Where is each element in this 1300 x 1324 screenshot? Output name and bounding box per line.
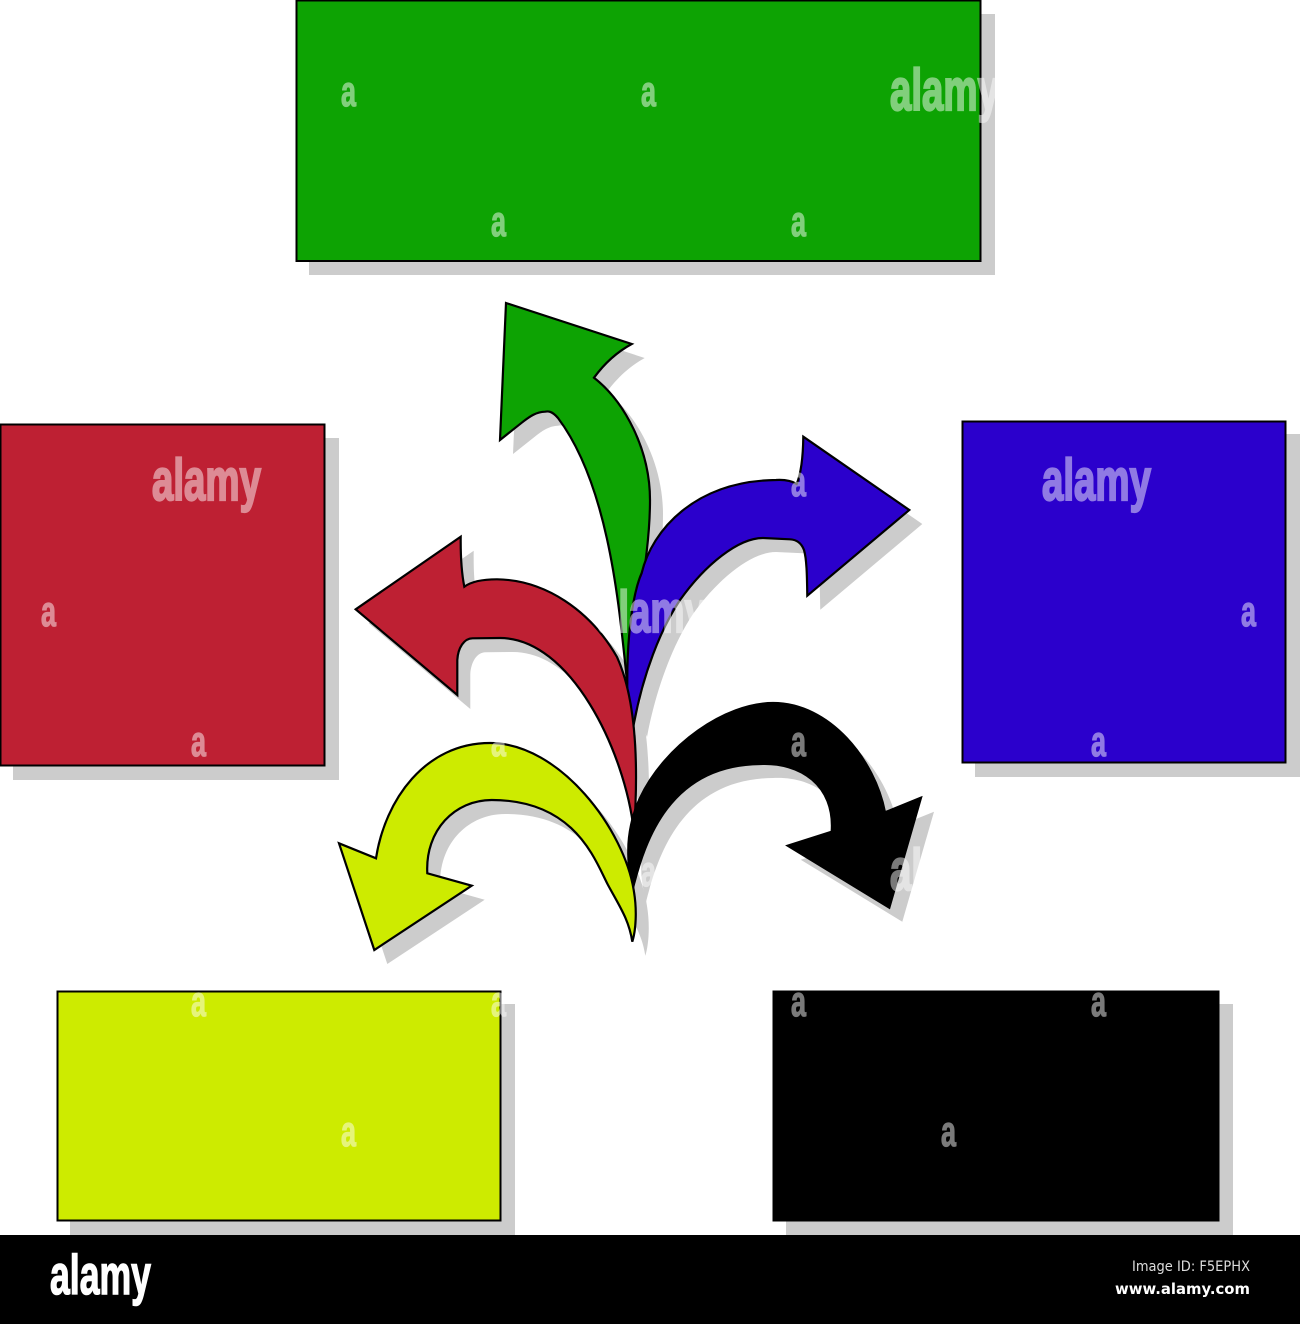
- watermarks: a: [1091, 978, 1107, 1026]
- watermarks: a: [641, 68, 657, 116]
- watermarks: alamy: [597, 580, 706, 645]
- watermarks: alamy: [890, 58, 999, 123]
- watermarks: a: [791, 458, 807, 506]
- watermarks: a: [191, 978, 207, 1026]
- watermarks: a: [491, 978, 507, 1026]
- footer bar: [0, 1235, 1300, 1324]
- panel: blue box: [962, 422, 1300, 777]
- watermarks: alamy: [890, 838, 999, 903]
- panel: green box: [296, 0, 995, 275]
- arrow: yellow: [339, 743, 636, 950]
- watermarks: a: [791, 718, 807, 766]
- watermarks: alamy: [152, 448, 261, 513]
- watermarks: a: [41, 588, 57, 636]
- watermarks: a: [491, 718, 507, 766]
- arrow: green: [500, 303, 650, 690]
- watermarks: a: [941, 1108, 957, 1156]
- watermarks: a: [341, 68, 357, 116]
- watermarks: a: [1091, 718, 1107, 766]
- arrow: red: [356, 537, 636, 832]
- arrow: blue: [627, 437, 909, 723]
- panel: black box: [774, 992, 1233, 1235]
- website: www.alamy.com: [1115, 1280, 1250, 1298]
- watermarks: alamy: [1042, 448, 1151, 513]
- watermarks: a: [791, 198, 807, 246]
- panel: yellow box: [58, 992, 515, 1235]
- watermarks: a: [491, 198, 507, 246]
- watermarks: a: [791, 978, 807, 1026]
- watermarks: [41, 58, 1257, 1156]
- footer logo: alamy: [50, 1243, 151, 1306]
- watermarks: a: [191, 718, 207, 766]
- arrow: black: [628, 703, 921, 908]
- arrow shadows: [352, 317, 934, 964]
- image id: Image ID: F5EPHX: [1132, 1259, 1250, 1275]
- watermarks: a: [1241, 588, 1257, 636]
- watermarks: a: [341, 1108, 357, 1156]
- watermarks: a: [641, 848, 657, 896]
- panel: red box: [0, 424, 339, 780]
